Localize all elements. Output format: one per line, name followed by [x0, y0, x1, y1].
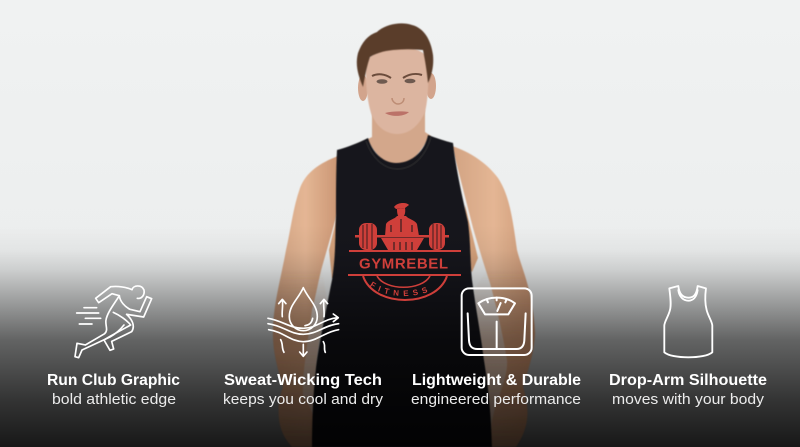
barbell [355, 235, 449, 238]
feature: drop-arm silhouette [609, 286, 767, 408]
nose [392, 98, 404, 104]
icon: weighing scale [462, 288, 532, 355]
lifter legs [381, 238, 424, 250]
left eye [376, 79, 388, 84]
fitness label: FITNESS [370, 282, 428, 296]
right ear [426, 73, 436, 99]
title: Sweat-Wicking Tech [224, 372, 382, 389]
subtitle: moves with your body [612, 391, 765, 408]
model in black tank top [273, 23, 535, 447]
left plates [359, 223, 377, 250]
right lat [462, 205, 478, 272]
face [366, 47, 428, 134]
hair [357, 23, 433, 87]
feature: sweat-wicking tech [223, 288, 384, 408]
neck [366, 110, 431, 165]
logo outer arc [363, 276, 447, 300]
title: Drop-Arm Silhouette [609, 372, 767, 389]
subtitle: engineered performance [411, 391, 581, 408]
left arm [273, 156, 338, 447]
tank top body [312, 135, 492, 447]
subtitle: keeps you cool and dry [223, 391, 384, 408]
icon: tank top [664, 286, 712, 357]
right forearm warm tone [474, 270, 535, 447]
right eye [404, 79, 416, 83]
subtitle: bold athletic edge [52, 391, 176, 408]
collar band [366, 137, 431, 169]
left ear [358, 75, 368, 101]
left eyebrow [372, 74, 391, 78]
dark gradient overlay [0, 225, 800, 447]
title: Lightweight & Durable [412, 372, 581, 389]
right eyebrow [403, 74, 422, 78]
brand name: GYMREBEL [359, 256, 448, 272]
lifter head [394, 203, 409, 218]
icon: water drop with arrows [268, 288, 339, 356]
logo [348, 203, 461, 301]
feature: lightweight and durable [411, 288, 581, 408]
right plates [429, 223, 445, 250]
title: Run Club Graphic [47, 372, 180, 389]
icon: runner [75, 286, 152, 358]
left lat [329, 212, 342, 278]
mouth [385, 111, 409, 116]
right arm [452, 146, 535, 447]
lower logo rule [348, 274, 461, 276]
feature: run club graphic [47, 286, 180, 408]
logo inner arc [377, 276, 430, 287]
upper logo rule [349, 250, 461, 252]
left forearm warm tone [273, 270, 327, 447]
lifter torso [385, 216, 419, 236]
lifter detail [391, 219, 412, 250]
